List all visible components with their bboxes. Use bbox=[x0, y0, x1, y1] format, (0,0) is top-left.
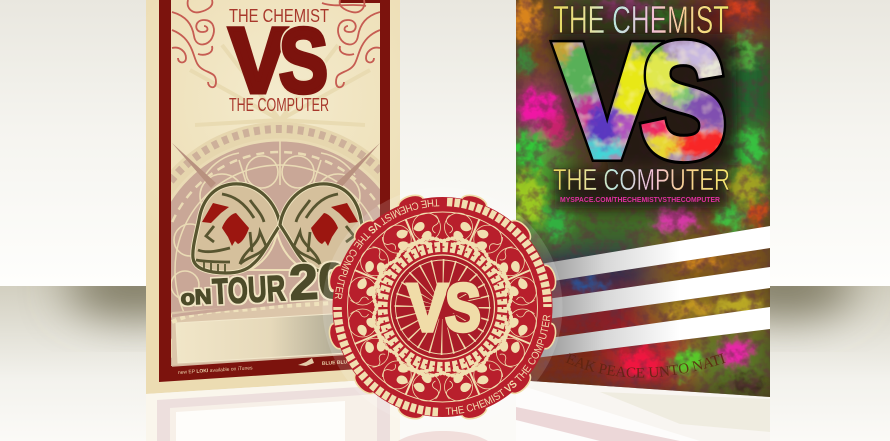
poster paper bbox=[146, 0, 400, 394]
arch between skulls bbox=[250, 232, 305, 270]
footer strip bbox=[172, 354, 348, 374]
heading: on tour: TOUR bbox=[211, 267, 286, 312]
paint texture bbox=[516, 0, 770, 400]
poster VS: V bbox=[556, 11, 658, 190]
paint blotches bbox=[514, 0, 768, 393]
heading: the chemist: THE CHEMIST bbox=[229, 5, 329, 26]
heading: on tour: 20 bbox=[288, 252, 348, 311]
footer strip: BLUE BLUE bbox=[322, 359, 351, 367]
seal halo bbox=[322, 187, 562, 427]
heading: VS: V bbox=[229, 10, 287, 112]
heading: on tour bbox=[179, 260, 342, 307]
lace mandala bbox=[171, 122, 380, 366]
poster VS bbox=[548, 38, 726, 164]
flourish top-right bbox=[322, 0, 380, 87]
heading: on tour: oN bbox=[180, 285, 212, 310]
medallion VS bbox=[407, 270, 481, 346]
lobes ring bbox=[348, 212, 538, 402]
icon: right skull bbox=[280, 184, 367, 273]
seal disc bbox=[332, 197, 552, 417]
background wall bbox=[0, 0, 890, 286]
heading: VS: S bbox=[279, 10, 328, 112]
background floor bbox=[0, 286, 890, 440]
poster url: MYSPACE.COM/THECHEMISTVSTHECOMPUTER bbox=[560, 195, 720, 204]
seal text: bottom-right: THE CHEMIST VS THE COMPUTER bbox=[446, 315, 550, 415]
red frame bbox=[159, 0, 390, 382]
beaded rim quadrants bbox=[337, 202, 548, 412]
seal text: top-left: THE CHEMIST VS THE COMPUTER bbox=[334, 199, 440, 299]
panel: left poster reflection bbox=[146, 378, 400, 441]
poster title: the computer: THE COMPUTER bbox=[553, 162, 730, 197]
medallion VS: S bbox=[445, 270, 481, 346]
heading: VS: S bbox=[279, 10, 328, 112]
heading: VS bbox=[226, 26, 327, 97]
medallion VS: S bbox=[445, 270, 481, 346]
seal reflection bbox=[398, 431, 488, 441]
poster VS: S bbox=[641, 11, 726, 190]
icon: left skull bbox=[193, 184, 280, 273]
soft shadow behind VS and titles bbox=[548, 6, 738, 208]
panel: right poster reflection bbox=[516, 380, 770, 441]
blank date box bbox=[176, 313, 348, 363]
poster title: the chemist: THE CHEMIST bbox=[553, 0, 729, 42]
flourish top-left bbox=[172, 0, 216, 87]
inner medallion bbox=[382, 247, 502, 367]
faint sunburst bbox=[190, 45, 370, 125]
large colour fields bbox=[516, 0, 770, 390]
medallion VS: V bbox=[407, 270, 448, 346]
poster slogan: EAK PEACE UNTO NATI bbox=[566, 353, 726, 378]
white stripe cutouts bbox=[535, 226, 770, 358]
panel: right colourful poster bbox=[516, 0, 770, 397]
footer strip: new EP LOKI available on iTunes bbox=[178, 365, 253, 376]
poster VS: V bbox=[556, 11, 658, 190]
poster VS: S bbox=[641, 11, 726, 190]
lower lace band bbox=[171, 300, 338, 365]
poster base paint bbox=[516, 0, 770, 400]
badge: red VS seal bbox=[328, 194, 556, 420]
panel: left tour poster bbox=[146, 0, 400, 394]
heading: the computer: THE COMPUTER bbox=[229, 94, 329, 115]
scalloped rim bbox=[327, 193, 558, 421]
